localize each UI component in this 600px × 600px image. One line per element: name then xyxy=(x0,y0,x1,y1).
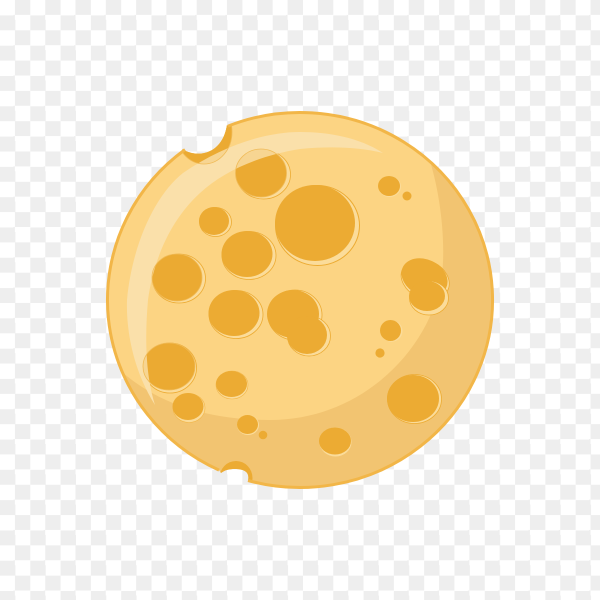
crater: lower-left xyxy=(143,343,196,393)
crater outlines showing through highlight xyxy=(143,100,286,390)
crater: small upper-left xyxy=(199,207,232,236)
crater: left xyxy=(152,254,206,303)
crater: tiny lower xyxy=(259,431,267,439)
lit disc xyxy=(109,114,443,420)
crater: right double lower lobe xyxy=(409,281,448,315)
crater: right double upper lobe xyxy=(400,258,450,292)
crater: middle-left xyxy=(222,231,276,280)
crater: bottom xyxy=(319,428,352,456)
illustration: cheese moon xyxy=(106,111,494,489)
crater: bottom bite xyxy=(220,461,252,480)
crescent highlight xyxy=(127,132,383,405)
crater: right tiny xyxy=(375,348,385,358)
crater: right small xyxy=(380,320,402,342)
crater: upper xyxy=(236,149,290,199)
moon body xyxy=(108,114,492,486)
moon outline xyxy=(107,112,493,487)
crater: lower right xyxy=(387,374,442,424)
crater: centre double xyxy=(267,290,330,356)
crater: tiny upper-right xyxy=(402,192,412,200)
crater: lower-left small xyxy=(172,393,205,422)
crater: lower small xyxy=(237,415,259,435)
crater: lower-middle xyxy=(216,371,248,399)
crater: top-left bite xyxy=(182,125,232,163)
crater: centre-left xyxy=(208,290,263,338)
crater: upper-right xyxy=(378,176,401,197)
crater: large xyxy=(275,185,360,266)
